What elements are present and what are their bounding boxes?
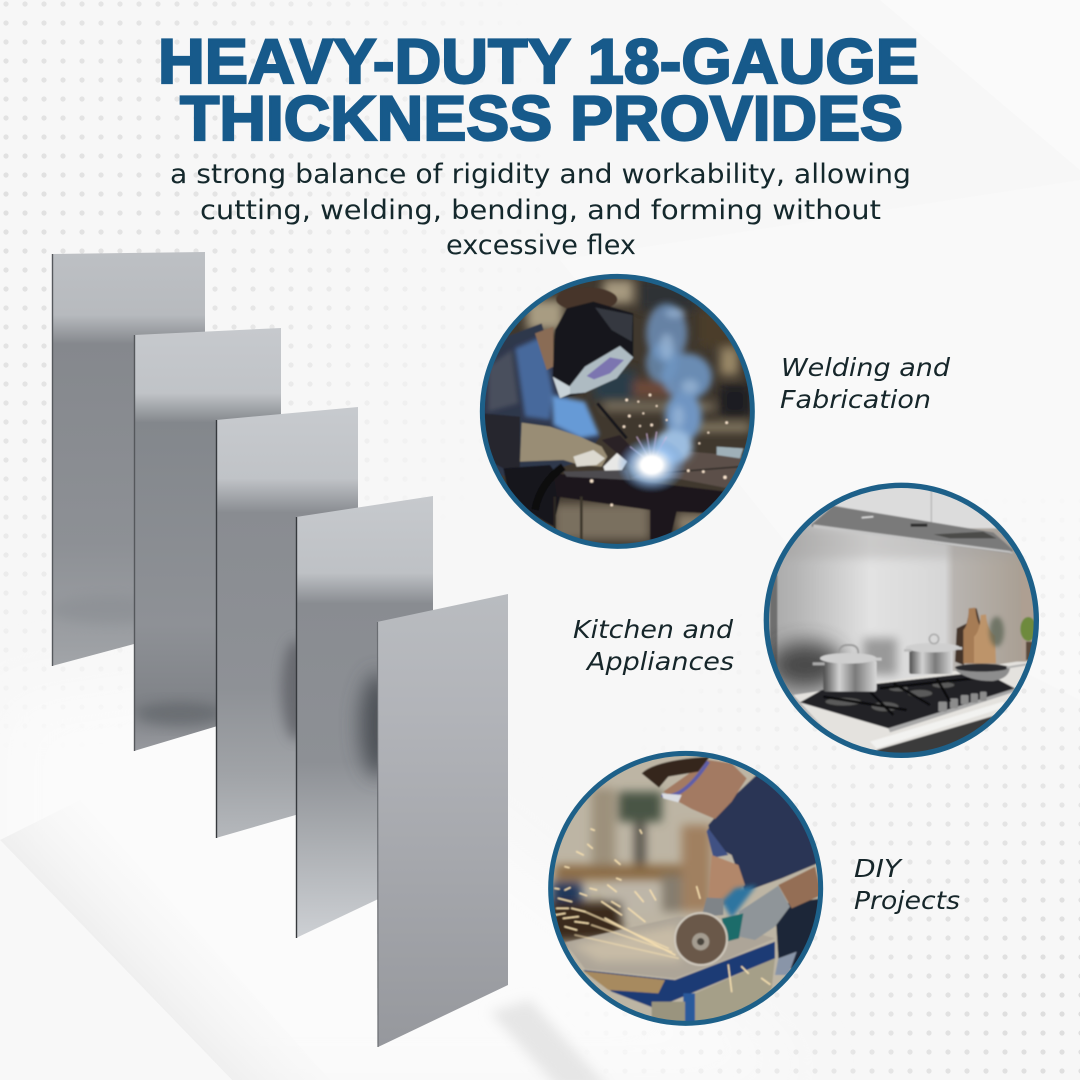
wall cabinets — [835, 492, 997, 530]
sheet 2 — [134, 328, 281, 751]
smoke — [646, 303, 712, 464]
subtitle text: excessive flex — [446, 230, 636, 261]
welding arc flash — [617, 437, 687, 493]
countertop — [793, 660, 1027, 746]
worker — [642, 757, 822, 975]
title — [158, 27, 919, 154]
angle grinder — [722, 913, 743, 942]
metal sheet — [565, 917, 775, 978]
cutting boards — [955, 608, 1004, 665]
sheet 3 — [216, 407, 358, 838]
workbench — [583, 942, 775, 1023]
label: Kitchen and Appliances: Kitchen and — [573, 615, 733, 644]
welder torso — [477, 323, 600, 527]
photo circle: kitchen — [764, 482, 1039, 758]
sheet 5 — [377, 594, 508, 1047]
label: Welding and Fabrication — [780, 353, 950, 414]
welding glove — [520, 423, 643, 473]
label: Welding and Fabrication: Fabrication — [780, 385, 931, 414]
subtitle text: cutting, welding, bending, and forming without — [200, 195, 881, 226]
title: THICKNESS PROVIDES — [180, 84, 903, 154]
label: DIY Projects — [854, 854, 960, 915]
subtitle text — [170, 159, 911, 261]
gloves — [739, 886, 790, 940]
plant — [1020, 617, 1036, 660]
sheet 1 — [50, 252, 205, 666]
gas hob — [800, 672, 1015, 732]
title: HEAVY-DUTY 18-GAUGE — [158, 27, 919, 97]
stainless steel sheets stack — [50, 252, 508, 1047]
photo circle: DIY grinding — [548, 750, 824, 1026]
sheet 4 — [296, 496, 433, 938]
sparks — [590, 394, 728, 506]
head — [663, 760, 747, 819]
welding table — [535, 447, 747, 540]
label: DIY Projects: DIY — [854, 854, 903, 883]
label: Kitchen and Appliances: Appliances — [585, 647, 734, 676]
cooking pots — [813, 634, 1027, 692]
grinding sparks — [555, 829, 770, 992]
label: Kitchen and Appliances — [573, 615, 734, 676]
range hood — [812, 506, 1013, 553]
label: DIY Projects: Projects — [854, 886, 960, 915]
label: Welding and Fabrication: Welding and — [781, 353, 950, 382]
subtitle text: a strong balance of rigidity and workability, allowing — [170, 159, 911, 190]
welding helmet — [553, 302, 633, 398]
photo circle: welding — [480, 274, 755, 549]
